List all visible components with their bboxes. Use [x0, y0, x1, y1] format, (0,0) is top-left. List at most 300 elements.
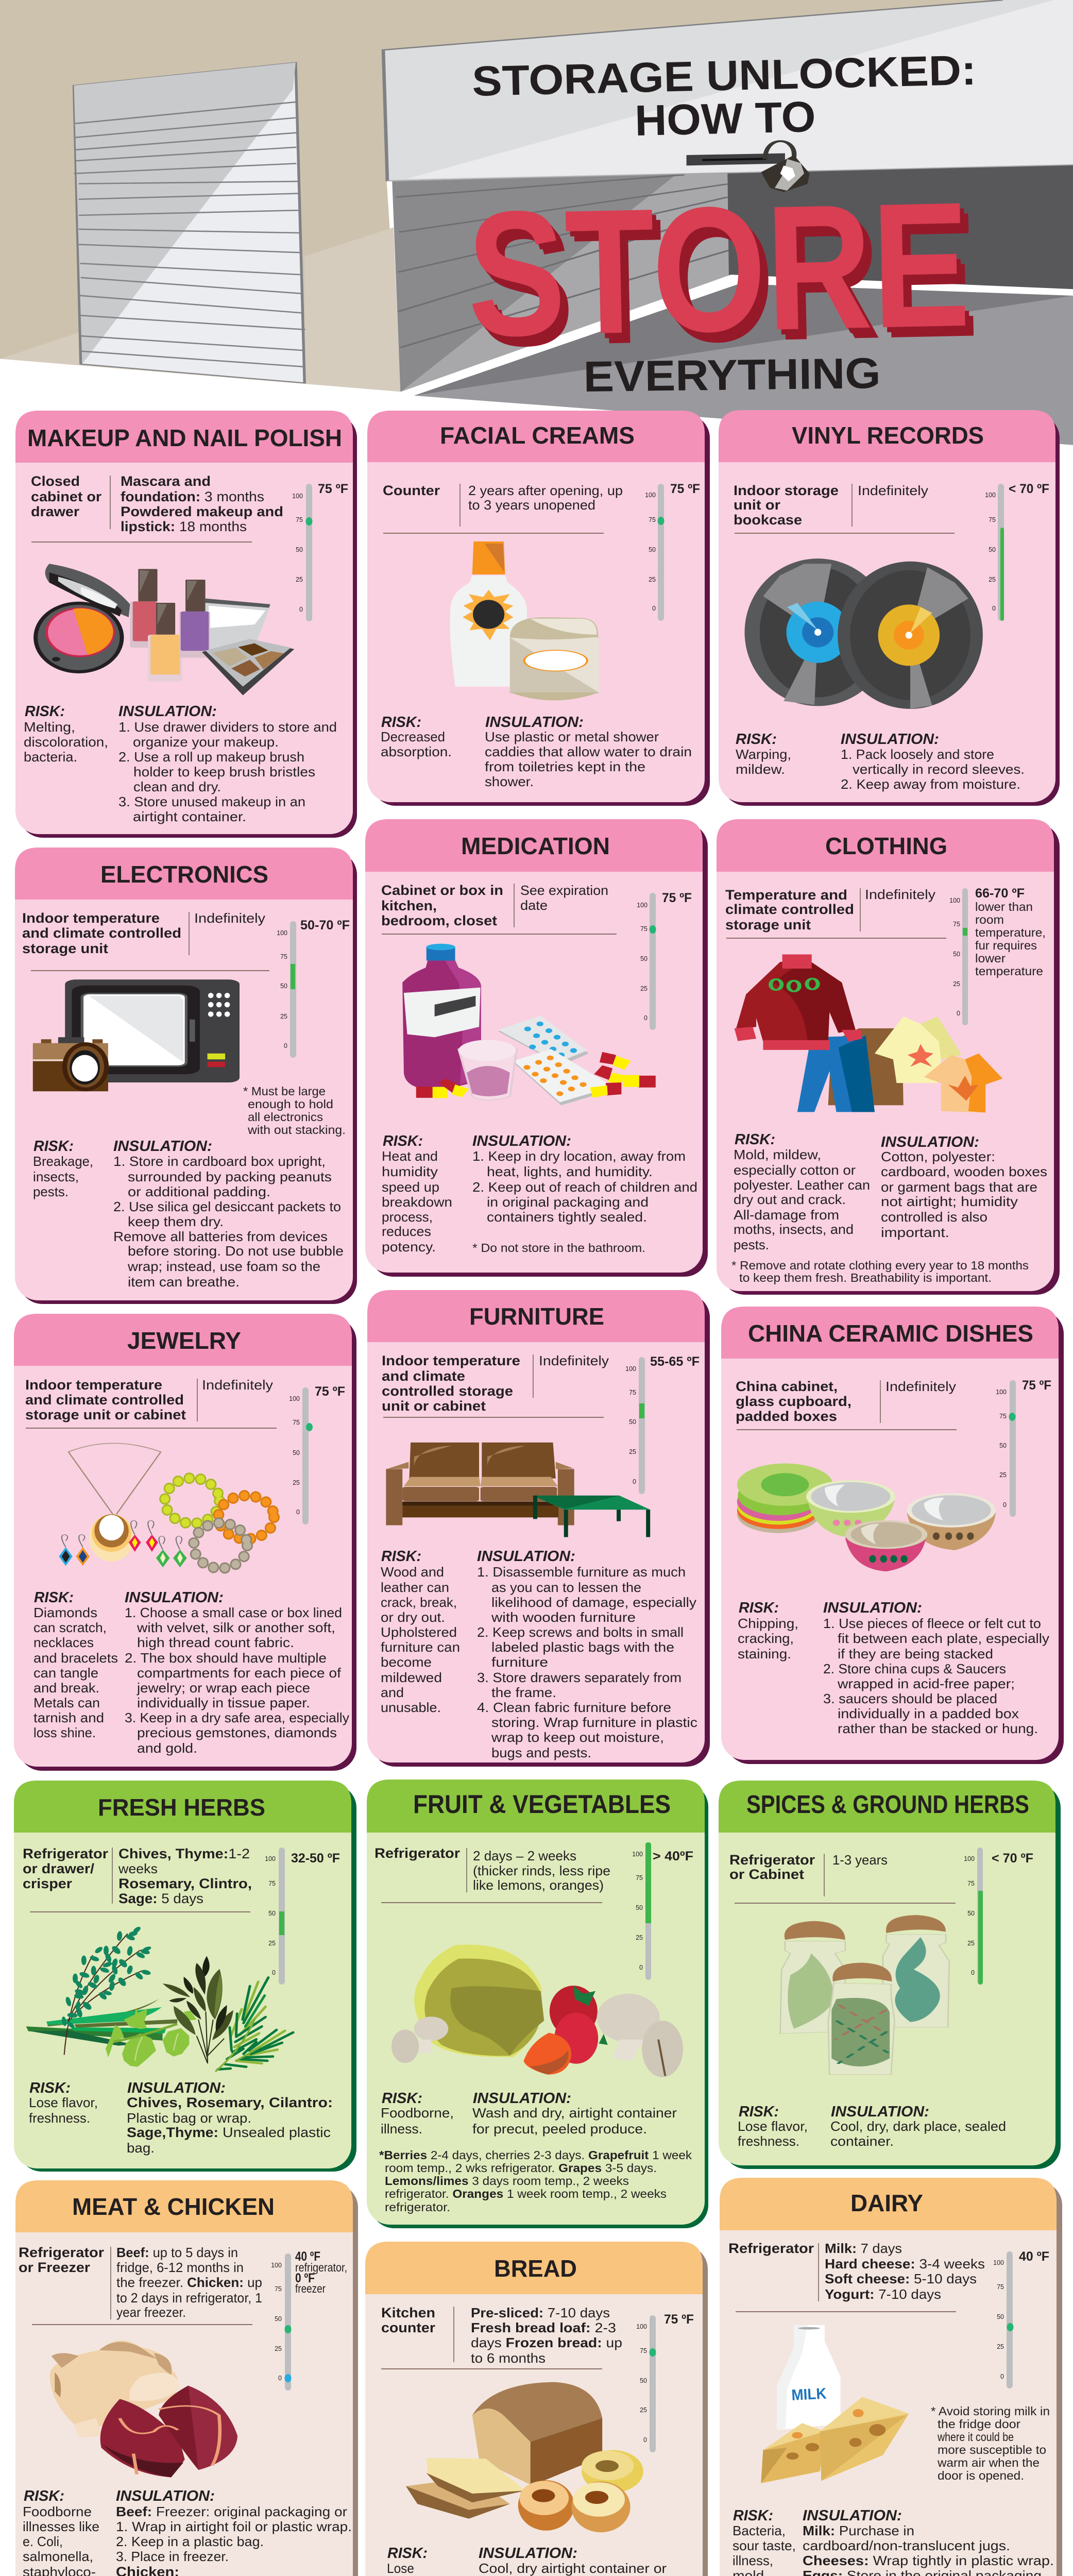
panel: jewelry — [14, 1314, 356, 1771]
note: box size — [243, 1084, 346, 1137]
risk: scratches and tangling: RISK: — [34, 1589, 74, 1606]
insulation tips: important. — [881, 1225, 949, 1240]
storage location: padded boxes — [736, 1409, 837, 1424]
storage location: drawer — [31, 504, 80, 519]
thermometer: under 70 F: 25 — [967, 1940, 975, 1947]
storage duration: See expiration — [520, 883, 608, 898]
storage location — [729, 1852, 956, 1903]
storage location — [736, 1379, 957, 1430]
insulation tips: 3. Store drawers separately from — [477, 1670, 682, 1685]
insulation tips: item can breathe. — [128, 1274, 240, 1290]
storage location — [25, 1377, 277, 1428]
storage location — [23, 1846, 250, 1912]
storage duration: weeks — [118, 1861, 158, 1876]
icon: fresh herbs — [26, 1926, 293, 2071]
icon: microwave and camera — [33, 979, 240, 1091]
thermometer: 50-70 F: 50-70 ºF — [300, 918, 350, 933]
thermometer: 32-50 F: 25 — [268, 1940, 276, 1947]
thermometer: under 70 F: 100 — [985, 492, 996, 499]
thermometer: 75 F: 75 ºF — [315, 1384, 345, 1399]
insulation tips: 1. Wrap in airtight foil or plastic wrap. — [116, 2519, 352, 2534]
icon: sofa and table — [386, 1443, 650, 1537]
risk: mold and mildew — [734, 1131, 870, 1252]
thermometer: 40 F refrigerator, 0 F freezer: 50 — [275, 2315, 282, 2323]
storage location: Kitchen — [381, 2305, 435, 2320]
risk: bacteria: Bacteria, — [733, 2523, 786, 2538]
risk: wood and leather damage: Upholstered — [381, 1624, 457, 1640]
risk: wood and leather damage — [381, 1548, 460, 1715]
heading: medication — [365, 819, 703, 872]
storage duration: Beef: up to 5 days in — [116, 2245, 238, 2260]
storage duration: Indefinitely — [202, 1377, 273, 1393]
thermometer: 40 F: 100 — [993, 2259, 1004, 2266]
heading: fruit and vegetables — [367, 1780, 705, 1833]
thermometer: under 70 F: 50 — [967, 1910, 975, 1917]
insulation tips: and gold. — [137, 1740, 197, 1756]
storage duration — [468, 483, 623, 513]
thermometer: under 70 F: 50 — [989, 546, 996, 553]
insulation tips: organize your makeup. — [133, 734, 279, 750]
thermometer: 32-50 F: 100 — [265, 1855, 276, 1862]
thermometer: 32-50 F: 32-50 ºF — [291, 1851, 340, 1866]
title: storage unlocked how to — [471, 47, 977, 145]
thermometer: 66-70 F: room — [975, 913, 1004, 926]
thermometer: 66-70 F: 50 — [953, 951, 960, 958]
thermometer: 75 F: 100 — [645, 492, 656, 499]
storage location: crisper — [23, 1876, 73, 1891]
thermometer: 55-65 F: 25 — [629, 1448, 636, 1455]
note: box size: all electronics — [248, 1110, 323, 1124]
insulation tips: INSULATION: — [831, 2104, 929, 2120]
risk: heat and humidity: process, — [382, 1209, 433, 1225]
thermometer: 40 F — [993, 2249, 1049, 2388]
insulation tips: bugs and pests. — [491, 1745, 591, 1760]
risk: breakage — [33, 1138, 93, 1199]
storage duration: year freezer. — [116, 2304, 186, 2320]
storage location: Indoor temperature — [382, 1353, 520, 1368]
risk: lose flavor — [29, 2080, 98, 2126]
storage duration: to 2 days in refrigerator, 1 — [116, 2290, 262, 2306]
insulation tips: 2. Keep out of reach of children and — [472, 1179, 697, 1195]
heading: facial creams — [367, 411, 705, 462]
heading: meat and chicken: MEAT & CHICKEN — [72, 2193, 275, 2220]
insulation tips: 2. Use silica gel desiccant packets to — [113, 1199, 341, 1214]
insulation tips: Cheeses: Wrap tightly in plastic wrap. — [803, 2553, 1054, 2568]
thermometer: 40 F refrigerator, 0 F freezer — [271, 2249, 347, 2391]
risk: lose flavor: freshness. — [29, 2110, 90, 2126]
storage duration: Indefinitely — [194, 910, 265, 926]
note: produce storage times: room temp., 2 wks refrigerator. Grapes 3-5 days. — [385, 2161, 657, 2175]
title: everything: EVERYTHING — [583, 349, 881, 401]
note: avoid fridge door: door is opened. — [938, 2469, 1024, 2482]
thermometer: 66-70 F: 100 — [949, 897, 960, 904]
storage location: Indoor temperature — [22, 910, 160, 926]
thermometer: 40 F refrigerator, 0 F freezer: 0 — [278, 2375, 282, 2382]
risk: breakage: Breakage, — [33, 1154, 93, 1169]
insulation tips: Milk: Purchase in — [803, 2523, 914, 2538]
insulation tips: jewelry; or wrap each piece — [137, 1680, 310, 1696]
note: avoid fridge door: warm air when the — [937, 2456, 1040, 2469]
risk: lose moisture: RISK: — [387, 2545, 428, 2562]
risk: foodborne illness: RISK: — [382, 2090, 422, 2107]
insulation tips: wrap; instead, use foam so the — [127, 1259, 320, 1274]
risk: scratches and tangling: Metals can — [33, 1695, 100, 1710]
storage location: and climate controlled — [22, 925, 181, 941]
storage duration: Indefinitely — [885, 1379, 956, 1394]
note: avoid fridge door: where it could be — [937, 2430, 1014, 2444]
thermometer: 75 F — [292, 482, 348, 621]
insulation tips: 2. Keep away from moisture. — [841, 776, 1020, 792]
insulation tips: caddies that allow water to drain — [485, 744, 692, 759]
note: produce storage times: refrigerator. Oranges 1 week room temp., 2 weeks — [385, 2187, 667, 2200]
thermometer: above 40 F — [632, 1842, 693, 1980]
panel: bread — [365, 2242, 708, 2576]
storage location: unit or cabinet — [382, 1398, 486, 1414]
risk: scratches and tangling: and bracelets — [33, 1650, 118, 1666]
risk: bacteria: sour taste, — [733, 2538, 796, 2553]
insulation tips: vertically in record sleeves. — [853, 761, 1025, 777]
thermometer: under 70 F: 0 — [992, 605, 996, 612]
risk: wood and leather damage: Wood and — [381, 1564, 444, 1580]
storage duration: to 3 years unopened — [468, 497, 595, 513]
storage duration: Hard cheese: 3-4 weeks — [825, 2256, 985, 2272]
risk: foodborne illness — [381, 2090, 454, 2137]
thermometer: above 40 F: 50 — [636, 1904, 643, 1911]
thermometer: 75 F: 75 — [640, 2347, 647, 2354]
risk: wood and leather damage: furniture can — [381, 1639, 460, 1655]
insulation tips — [472, 2090, 677, 2137]
storage location — [734, 483, 955, 533]
storage duration: Indefinitely — [539, 1353, 609, 1368]
insulation tips — [803, 2507, 1054, 2576]
storage duration: Milk: 7 days — [825, 2241, 902, 2256]
risk: lose flavor: Lose flavor, — [29, 2095, 98, 2110]
insulation tips: for precut, peeled produce. — [472, 2121, 647, 2137]
insulation tips: INSULATION: — [118, 703, 217, 720]
storage location: China cabinet, — [736, 1379, 838, 1394]
insulation tips: INSULATION: — [479, 2545, 577, 2562]
risk: mold and mildew: moths, insects, and — [734, 1222, 854, 1237]
insulation tips: INSULATION: — [823, 1600, 922, 1616]
insulation tips: 2. Store china cups & Saucers — [823, 1661, 1006, 1676]
risk: melting: RISK: — [25, 703, 65, 720]
risk: heat and humidity: speed up — [382, 1179, 439, 1195]
title: store: STORE — [465, 165, 972, 374]
thermometer: 66-70 F: 75 — [953, 921, 960, 928]
thermometer: 75 F: 50 — [649, 546, 656, 553]
insulation tips: high thread count fabric. — [137, 1635, 294, 1650]
insulation tips: controlled is also — [881, 1209, 987, 1225]
icon: vinyl records — [745, 558, 983, 709]
insulation tips: furniture — [491, 1654, 548, 1670]
storage duration: Indefinitely — [865, 887, 935, 902]
thermometer: 40 F: 0 — [1000, 2373, 1004, 2380]
risk: mold and mildew: Mold, mildew, — [734, 1147, 821, 1162]
thermometer: under 70 F: 100 — [964, 1855, 975, 1862]
thermometer: 75 F — [637, 891, 692, 1030]
insulation tips: INSULATION: — [125, 1589, 224, 1606]
risk: warping — [736, 731, 791, 777]
heading: dairy — [720, 2178, 1057, 2230]
storage location: storage unit or cabinet — [25, 1407, 186, 1422]
panel: dairy — [720, 2178, 1062, 2576]
thermometer: 40 F refrigerator, 0 F freezer: 100 — [271, 2262, 282, 2269]
thermometer: 50-70 F: 25 — [280, 1013, 287, 1020]
heading: dairy: DAIRY — [850, 2190, 923, 2216]
storage location: or drawer/ — [23, 1861, 95, 1876]
thermometer: 40 F refrigerator, 0 F freezer: 40 ºF — [295, 2249, 320, 2264]
storage duration — [520, 883, 608, 913]
risk: heat and humidity: RISK: — [383, 1133, 423, 1149]
thermometer: above 40 F: 25 — [636, 1934, 643, 1941]
insulation tips: Wash and dry, airtight container — [472, 2105, 677, 2121]
insulation tips: individually in a padded box — [838, 1706, 1019, 1721]
thermometer: 50-70 F — [277, 918, 350, 1058]
storage duration: Powdered makeup and — [121, 504, 283, 519]
thermometer: 55-65 F: 55-65 ºF — [650, 1354, 700, 1369]
storage location: Refrigerator — [374, 1845, 461, 1861]
thermometer: 40 F refrigerator, 0 F freezer: freezer — [295, 2282, 326, 2295]
insulation tips: shower. — [485, 774, 534, 789]
insulation tips: heat, lights, and humidity. — [487, 1164, 653, 1179]
note: avoid fridge door — [931, 2404, 1050, 2482]
thermometer: 50-70 F: 50 — [280, 982, 287, 990]
panel: electronics — [15, 848, 357, 1304]
thermometer: 66-70 F: lower — [975, 952, 1006, 965]
storage duration: to 6 months — [471, 2350, 546, 2366]
insulation tips: 4. Clean fabric furniture before — [477, 1700, 671, 1715]
risk: heat and humidity: reduces — [382, 1224, 431, 1239]
insulation tips: keep them dry. — [128, 1214, 224, 1229]
thermometer: 40 F refrigerator, 0 F freezer: 25 — [275, 2345, 282, 2352]
thermometer: 75 F — [996, 1378, 1051, 1517]
thermometer: 40 F: 75 — [997, 2283, 1004, 2291]
thermometer: 75 F: 25 — [999, 1471, 1007, 1479]
storage duration: 2 days – 2 weeks — [473, 1848, 576, 1863]
thermometer: 40 F refrigerator, 0 F freezer: refrigerator, — [295, 2261, 347, 2274]
icon: lettuce, strawberries and mushrooms — [391, 1945, 683, 2077]
insulation tips: INSULATION: — [116, 2488, 215, 2504]
risk: decreased absorption — [381, 714, 452, 759]
heading: china ceramic dishes — [721, 1307, 1059, 1359]
risk: mold and mildew: polyester. Leather can — [734, 1177, 870, 1193]
thermometer: 32-50 F: 75 — [268, 1880, 276, 1887]
insulation tips — [830, 2104, 1006, 2149]
insulation tips: 1. Choose a small case or box lined — [125, 1605, 342, 1620]
thermometer: 75 F: 0 — [644, 1014, 648, 1022]
thermometer: 75 F: 25 — [640, 985, 648, 992]
insulation tips: 2. Keep screws and bolts in small — [477, 1624, 684, 1640]
insulation tips: rather than be stacked or hung. — [838, 1721, 1038, 1736]
thermometer: 55-65 F — [625, 1354, 700, 1494]
risk: melting: discoloration, — [24, 734, 108, 750]
thermometer: 75 F: 75 ºF — [318, 482, 348, 496]
heading: fresh herbs — [14, 1781, 351, 1833]
thermometer: 40 F: 40 ºF — [1019, 2249, 1049, 2264]
storage location — [22, 910, 269, 971]
heading: clothing: CLOTHING — [825, 833, 947, 859]
thermometer: 66-70 F: temperature — [975, 964, 1043, 978]
risk: scratches and tangling: can tangle — [33, 1665, 98, 1681]
risk: heat and humidity: humidity — [382, 1164, 438, 1179]
thermometer: under 70 F — [985, 482, 1049, 621]
thermometer: 75 F: 100 — [636, 2323, 647, 2330]
risk: foodborne illnesses: Foodborne — [23, 2504, 92, 2519]
storage location: unit or — [734, 497, 781, 513]
insulation tips: INSULATION: — [127, 2080, 226, 2096]
panel: clothing — [717, 819, 1060, 1295]
storage duration: 1-3 years — [832, 1852, 888, 1868]
insulation tips — [823, 1600, 1049, 1736]
thermometer: above 40 F: 100 — [632, 1851, 643, 1858]
thermometer: 66-70 F: 25 — [953, 980, 960, 988]
storage duration: (thicker rinds, less ripe — [473, 1863, 610, 1878]
insulation tips: 1. Use drawer dividers to store and — [118, 719, 337, 735]
storage duration — [121, 473, 283, 534]
thermometer: 75 F: 25 — [640, 2406, 647, 2414]
heading: medication: MEDICATION — [461, 833, 610, 859]
risk: wood and leather damage: leather can — [381, 1580, 449, 1595]
storage location: Refrigerator — [729, 1852, 815, 1868]
thermometer: 75 F: 25 — [293, 1479, 300, 1486]
thermometer: 75 F: 0 — [643, 2436, 647, 2444]
insulation tips: INSULATION: — [473, 2090, 571, 2107]
thermometer: 40 F refrigerator, 0 F freezer: 0 ºF — [295, 2271, 315, 2285]
thermometer: 66-70 F: temperature, — [975, 926, 1046, 939]
insulation tips: surrounded by packing peanuts — [128, 1169, 332, 1184]
thermometer: 75 F: 100 — [292, 493, 303, 500]
storage duration: 2 years after opening, up — [468, 483, 623, 498]
heading: bread — [365, 2242, 703, 2294]
panel: spices and ground herbs — [719, 1781, 1061, 2169]
risk: scratches and tangling: necklaces — [33, 1635, 94, 1650]
note: box size: * Must be large — [243, 1084, 326, 1098]
insulation tips: INSULATION: — [485, 714, 584, 731]
insulation tips: before storing. Do not use bubble — [128, 1243, 344, 1259]
thermometer: 75 F: 50 — [296, 546, 303, 553]
thermometer: under 70 F: 75 — [989, 516, 996, 523]
storage duration — [116, 2245, 262, 2320]
thermometer: 50-70 F: 0 — [284, 1042, 287, 1049]
insulation tips: cardboard, wooden boxes — [881, 1164, 1047, 1179]
insulation tips: as you can to lessen the — [491, 1580, 641, 1595]
risk: lose flavor: RISK: — [739, 2104, 779, 2120]
thermometer: 55-65 F: 75 — [629, 1389, 636, 1396]
risk: foodborne illnesses — [23, 2488, 100, 2576]
icon: spice jars — [780, 1915, 949, 2075]
heading: makeup and nail polish — [15, 411, 353, 463]
title: store: STORE — [470, 170, 976, 379]
risk: decreased absorption: absorption. — [381, 744, 452, 759]
risk: wood and leather damage: RISK: — [381, 1548, 421, 1565]
heading: clothing — [717, 819, 1054, 872]
risk: wood and leather damage: or dry out. — [381, 1609, 445, 1625]
insulation tips: individually in tissue paper. — [137, 1695, 310, 1710]
risk: foodborne illnesses: salmonella, — [23, 2549, 93, 2564]
storage location: controlled storage — [382, 1383, 513, 1399]
thermometer: 75 F: 100 — [637, 902, 648, 909]
risk: chipping: cracking, — [738, 1631, 794, 1646]
storage location: Indoor storage — [734, 483, 839, 498]
storage location: Cabinet or box in — [381, 883, 503, 898]
risk: chipping: staining. — [738, 1646, 791, 1662]
heading: bread: BREAD — [494, 2255, 577, 2282]
storage location: bedroom, closet — [381, 913, 497, 928]
risk: lose flavor: RISK: — [29, 2080, 71, 2096]
insulation tips — [113, 1138, 344, 1290]
insulation tips: wrapped in acid-free paper; — [837, 1676, 1015, 1691]
risk: mold and mildew: All-damage from — [734, 1207, 839, 1223]
note: produce storage times: refrigerator. — [385, 2200, 450, 2214]
storage duration: Indefinitely — [858, 483, 928, 498]
risk: bacteria — [733, 2507, 796, 2576]
icon: bread loaf and rolls — [406, 2382, 643, 2532]
icon: lotion bottle and cream jar — [450, 541, 599, 700]
insulation tips: if they are being stacked — [838, 1646, 993, 1662]
wall and doors illustration — [0, 0, 1073, 445]
insulation tips: INSULATION: — [477, 1548, 575, 1565]
risk: heat and humidity: breakdown — [382, 1194, 452, 1210]
risk: mold and mildew: pests. — [734, 1237, 769, 1252]
thermometer: 66-70 F — [949, 886, 1046, 1025]
heading: facial creams: FACIAL CREAMS — [440, 422, 635, 449]
insulation tips — [477, 1548, 697, 1760]
insulation tips: Cool, dry, dark place, sealed — [830, 2119, 1006, 2134]
insulation tips: from toiletries kept in the — [485, 759, 645, 774]
storage location — [381, 2305, 602, 2369]
insulation tips: 1. Keep in dry location, away from — [472, 1148, 686, 1164]
insulation tips: or additional padding. — [128, 1184, 270, 1199]
heading: jewelry: JEWELRY — [127, 1327, 241, 1354]
insulation tips — [127, 2080, 333, 2156]
storage duration: days Frozen bread: up — [471, 2335, 622, 2350]
insulation tips: 2. Keep in a plastic bag. — [116, 2534, 264, 2549]
thermometer: 66-70 F: fur requires — [975, 939, 1037, 952]
icon: chicken and meat — [50, 2341, 237, 2477]
thermometer: 66-70 F: 66-70 ºF — [975, 886, 1025, 901]
storage location: Refrigerator — [19, 2245, 105, 2260]
risk: breakage: RISK: — [33, 1138, 74, 1155]
storage duration: like lemons, oranges) — [473, 1877, 604, 1893]
title: storage unlocked how to: STORAGE UNLOCKED: — [471, 47, 977, 105]
storage duration: Pre-sliced: 7-10 days — [471, 2305, 610, 2320]
risk: lose flavor: Lose flavor, — [738, 2119, 808, 2134]
risk: foodborne illness: Foodborne, — [381, 2105, 454, 2121]
risk: melting: bacteria. — [24, 749, 77, 765]
insulation tips: 3. saucers should be placed — [823, 1691, 997, 1706]
insulation tips: the frame. — [491, 1685, 556, 1700]
risk: foodborne illness: illness. — [381, 2121, 422, 2137]
thermometer: 75 F: 75 ºF — [670, 482, 700, 496]
thermometer: 75 F: 75 — [296, 516, 303, 523]
risk: melting: Melting, — [24, 719, 75, 735]
insulation tips: Plastic bag or wrap. — [127, 2110, 251, 2126]
note: produce storage times — [379, 2148, 692, 2214]
risk: heat and humidity: Heat and — [382, 1148, 438, 1164]
panel: vinyl records — [719, 410, 1060, 806]
insulation tips: 1. Pack loosely and store — [841, 747, 994, 762]
risk: scratches and tangling: Diamonds — [33, 1605, 97, 1620]
storage location: Refrigerator — [728, 2241, 814, 2256]
storage location: Temperature and — [725, 887, 847, 903]
storage location: cabinet or — [31, 489, 102, 504]
note: avoid fridge door: * Avoid storing milk in — [931, 2404, 1050, 2418]
thermometer: 75 F: 0 — [299, 606, 303, 613]
insulation tips: precious gemstones, diamonds — [137, 1725, 337, 1740]
storage location — [31, 473, 252, 542]
storage location: climate controlled — [725, 902, 854, 917]
insulation tips: 1. Use pieces of fleece or felt cut to — [823, 1616, 1041, 1631]
